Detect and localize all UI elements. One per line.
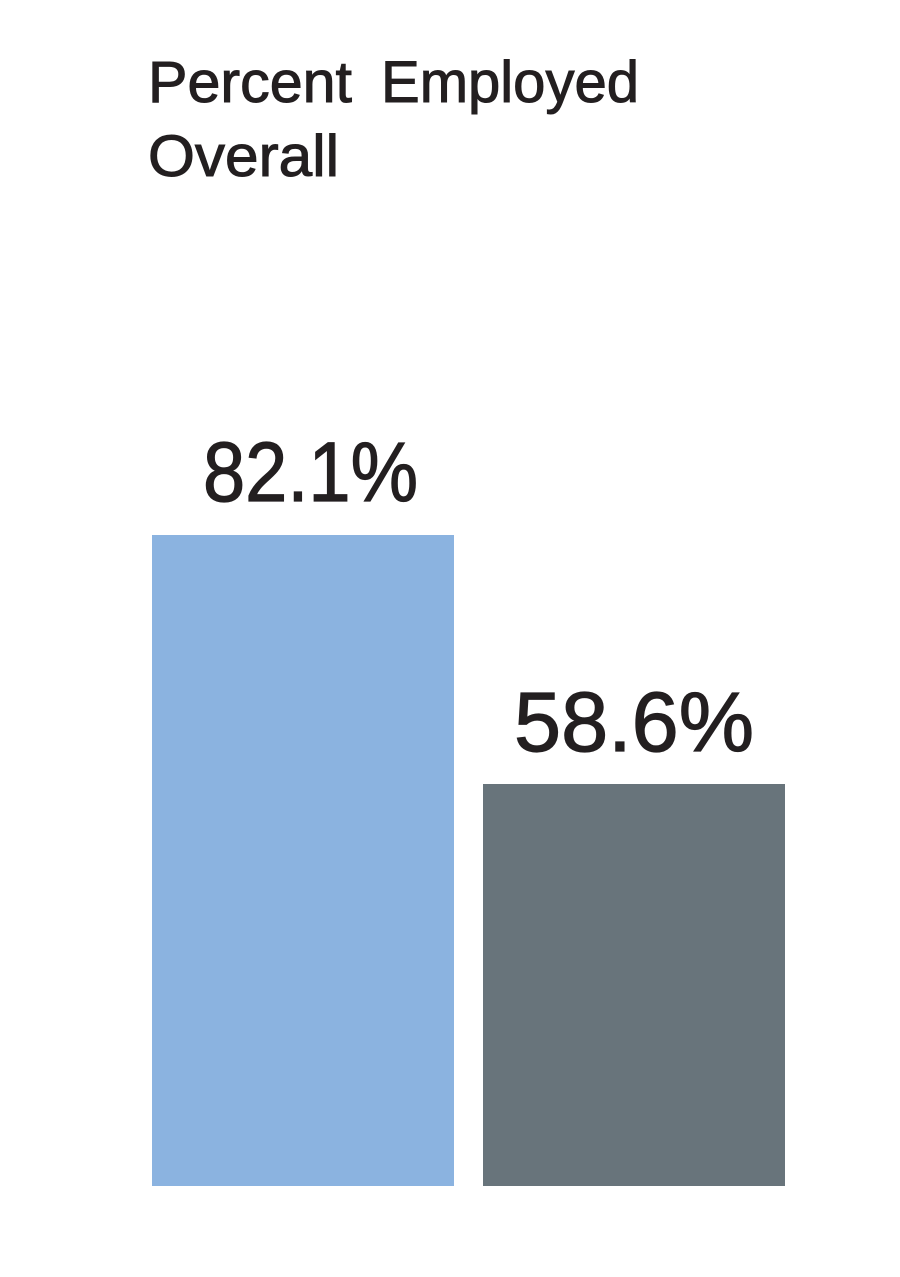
title: Employed — [381, 50, 639, 115]
value label: 58.6%: 58.6% — [514, 675, 754, 769]
title — [148, 50, 639, 189]
value label: 82.1%: 82.1% — [203, 425, 418, 519]
bar: 82.1% — [152, 535, 454, 1186]
title: Percent — [148, 50, 352, 115]
bar: 58.6% — [483, 784, 785, 1186]
title: Overall — [148, 124, 339, 189]
